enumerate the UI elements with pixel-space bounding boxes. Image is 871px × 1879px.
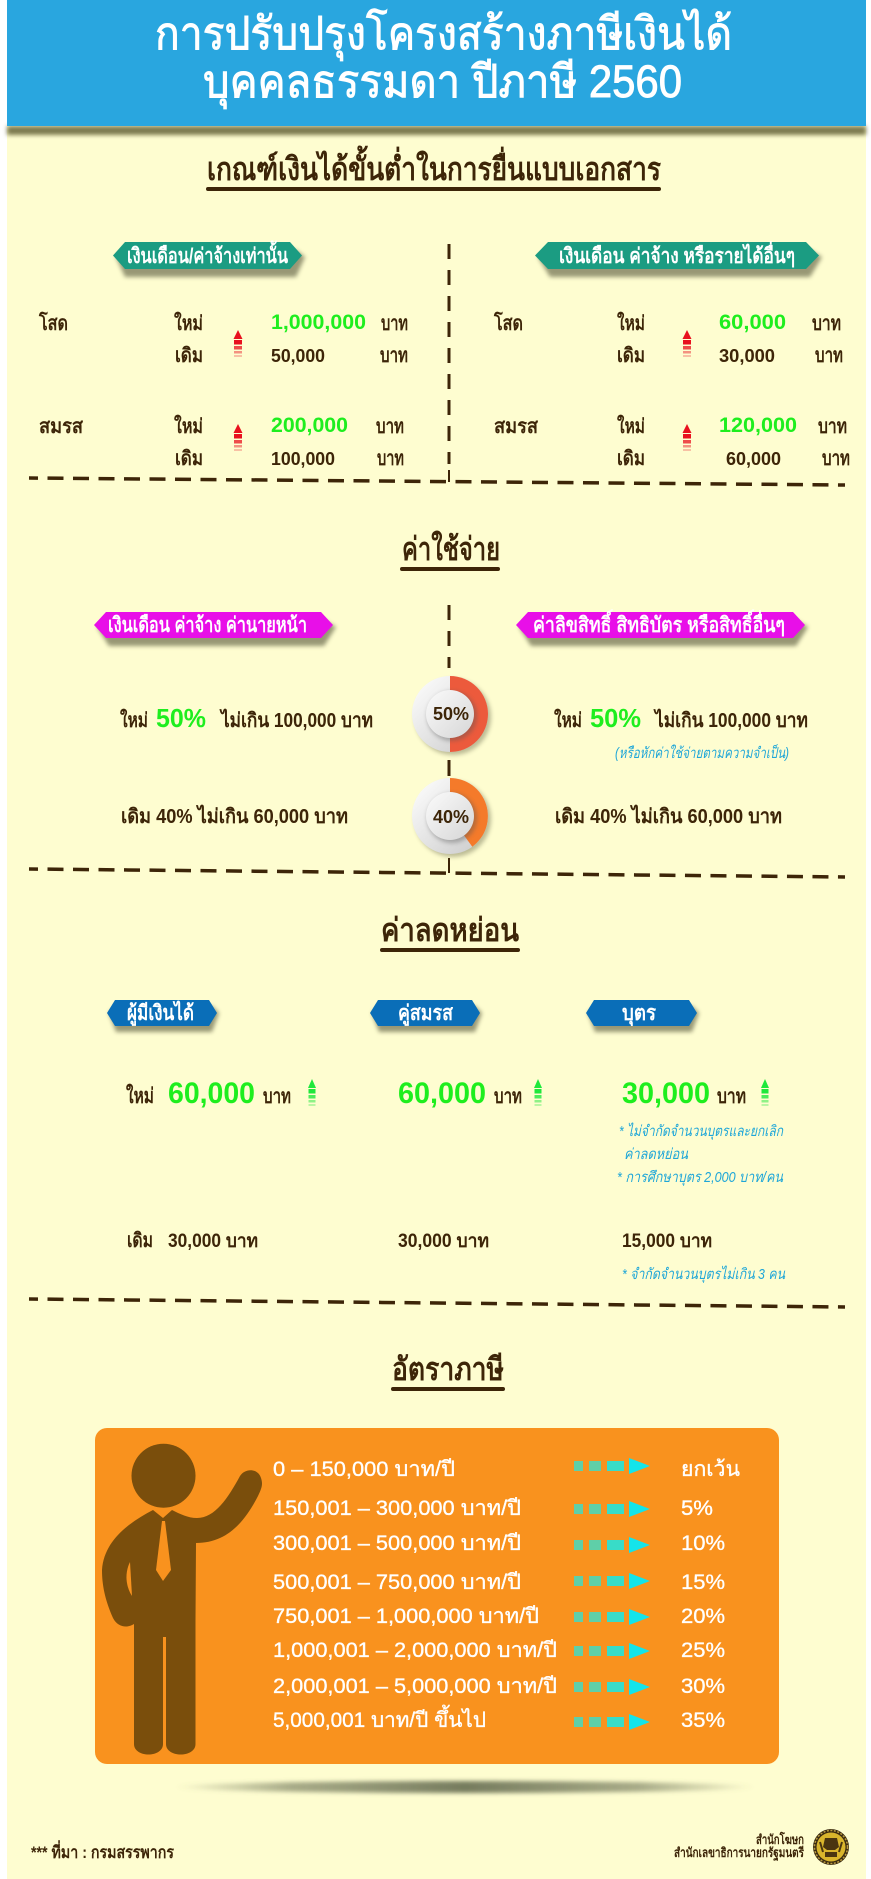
pill: spouse: คู่สมรส — [398, 1002, 453, 1027]
icon: green up arrow spouse — [534, 1079, 542, 1106]
right table: salary or other income: ใหม่ — [617, 414, 645, 438]
pill: taxpayer: ผู้มีเงินได้ — [127, 1000, 194, 1027]
tax rate values: 25% — [681, 1639, 725, 1662]
tax rate bracket labels: 150,001 – 300,000 บาท/ปี — [273, 1497, 521, 1520]
right table: salary or other income — [493, 311, 850, 470]
section heading: tax rate: อัตราภาษี — [392, 1351, 504, 1387]
allowance: old values: 15,000 บาท — [622, 1231, 712, 1252]
note: child old: * จำกัดจำนวนบุตรไม่เกิน 3 คน — [622, 1265, 786, 1283]
donut: 50 percent: 50% — [433, 704, 469, 724]
pill: salary only — [113, 240, 305, 277]
expenses: salary old: เดิม 40% ไม่เกิน 60,000 บาท — [121, 804, 348, 828]
allowance: old values: 30,000 บาท — [168, 1231, 258, 1252]
header banner — [7, 0, 866, 135]
left table: salary only: 100,000 — [271, 449, 335, 469]
section heading: minimum income — [206, 145, 661, 191]
pill: salary and commission — [94, 612, 336, 646]
pill: salary and commission: เงินเดือน ค่าจ้าง ค่านายหน้า — [108, 613, 307, 637]
icon: presenter figure — [102, 1444, 262, 1754]
note: actual expenses: (หรือหักค่าใช้จ่ายตามความจำเป็น) — [615, 744, 789, 762]
icon: red up arrow right single — [682, 330, 692, 357]
tax rate bracket labels: 750,001 – 1,000,000 บาท/ปี — [273, 1605, 539, 1628]
right table: salary or other income: เดิม — [617, 448, 645, 470]
section heading: allowances: ค่าลดหย่อน — [381, 912, 519, 948]
expenses: salary new: 50% — [156, 703, 206, 733]
panel divider: minimum income — [29, 244, 845, 485]
right table: salary or other income: สมรส — [494, 416, 539, 438]
tax rate values: 15% — [681, 1571, 725, 1594]
notes: child new — [617, 1122, 784, 1186]
left table: salary only: 1,000,000 — [271, 311, 366, 334]
left table: salary only: บาท — [380, 345, 408, 367]
right table: salary or other income: บาท — [815, 345, 843, 367]
pill: salary or other income: เงินเดือน ค่าจ้าง หรือรายได้อื่นๆ — [559, 240, 795, 268]
right table: salary or other income: บาท — [822, 448, 850, 470]
left table: salary only: โสด — [38, 311, 68, 335]
tax rate values — [681, 1458, 740, 1732]
right table: salary or other income: โสด — [493, 311, 523, 335]
tax rate values: 30% — [681, 1675, 725, 1698]
expenses: salary new: ใหม่ — [120, 708, 148, 732]
tax rate values: 20% — [681, 1605, 725, 1628]
expenses: royalties old: เดิม 40% ไม่เกิน 60,000 บาท — [555, 804, 782, 828]
allowance: child new: 30,000 — [622, 1077, 710, 1110]
tax rate bracket labels: 0 – 150,000 บาท/ปี — [273, 1458, 455, 1481]
title: การปรับปรุงโครงสร้างภาษีเงินได้ — [155, 8, 732, 61]
section heading: expenses — [400, 530, 500, 571]
expenses: royalties new: ไม่เกิน 100,000 บาท — [653, 708, 808, 732]
left table: salary only: ใหม่ — [174, 311, 203, 335]
title: บุคคลธรรมดา ปีภาษี 2560 — [203, 56, 682, 109]
tax rate bracket labels — [273, 1458, 557, 1732]
icon: green up arrow taxpayer — [308, 1079, 316, 1106]
credit: publisher — [674, 1831, 804, 1862]
tax rate bracket labels: 2,000,001 – 5,000,000 บาท/ปี — [273, 1675, 557, 1698]
left table: salary only: 200,000 — [271, 414, 348, 437]
icon: green up arrow child — [761, 1079, 769, 1106]
left table: salary only: ใหม่ — [174, 414, 203, 438]
tax rate values: 5% — [681, 1497, 713, 1520]
icon: red up arrow married — [234, 424, 242, 451]
allowance: spouse new: 60,000 — [398, 1077, 486, 1110]
allowance: taxpayer new: 60,000 — [168, 1077, 255, 1110]
icon: red up arrow single — [234, 330, 242, 357]
left table: salary only: สมรส — [39, 416, 84, 438]
notes: child new: * การศึกษาบุตร 2,000 บาท/คน — [617, 1169, 784, 1186]
right table: salary or other income: เดิม — [617, 345, 645, 367]
pill: copyright and patents — [516, 609, 808, 646]
pill: salary only: เงินเดือน/ค่าจ้างเท่านั้น — [127, 240, 288, 268]
allowance: old values — [127, 1230, 712, 1252]
right table: salary or other income: 120,000 — [719, 414, 797, 437]
pill: child — [586, 1000, 699, 1032]
right table: salary or other income: 60,000 — [719, 311, 786, 334]
left table: salary only — [38, 311, 408, 470]
right table: salary or other income: 60,000 — [726, 449, 781, 469]
pill: copyright and patents: ค่าลิขสิทธิ์ สิทธิบัตร หรือสิทธิ์อื่นๆ — [533, 609, 785, 637]
pill: child: บุตร — [622, 1002, 657, 1027]
notes: child new: ค่าลดหย่อน — [624, 1146, 689, 1163]
icon: red up arrow right married — [682, 424, 692, 451]
donut: 40 percent: 40% — [433, 807, 469, 827]
tax rate values: 10% — [681, 1532, 725, 1555]
right table: salary or other income: บาท — [818, 416, 847, 438]
donut: 50 percent — [412, 676, 491, 755]
right table: salary or other income: 30,000 — [719, 346, 775, 366]
tax rate bracket labels: 300,001 – 500,000 บาท/ปี — [273, 1532, 521, 1555]
panel: tax rate table — [95, 1428, 779, 1764]
donut: 40 percent — [412, 778, 491, 857]
tax rate bracket labels: 500,001 – 750,000 บาท/ปี — [273, 1571, 521, 1594]
pill: spouse — [370, 1000, 482, 1032]
expenses: royalties new: 50% — [590, 703, 641, 733]
left table: salary only: บาท — [377, 448, 404, 470]
divider: allowances — [29, 1299, 845, 1307]
expenses: royalties new — [554, 703, 808, 733]
panel ground shadow — [175, 1781, 755, 1793]
tax rate values: ยกเว้น — [681, 1458, 740, 1481]
notes: child new: * ไม่จำกัดจำนวนบุตรและยกเลิก — [619, 1122, 784, 1140]
allowance: taxpayer new — [126, 1077, 291, 1110]
section heading: minimum income: เกณฑ์เงินได้ขั้นต่ำในการยื่นแบบเอกสาร — [207, 145, 661, 187]
allowance: spouse new: บาท — [494, 1086, 522, 1108]
credit: publisher: สำนักโฆษก — [756, 1831, 804, 1847]
panel divider: expenses — [29, 605, 845, 877]
allowance: taxpayer new: ใหม่ — [126, 1083, 154, 1108]
tax rate bracket labels: 5,000,001 บาท/ปี ขึ้นไป — [273, 1705, 486, 1732]
allowance: old values: เดิม — [127, 1230, 153, 1252]
source note: *** ที่มา : กรมสรรพากร — [31, 1840, 175, 1862]
right table: salary or other income: ใหม่ — [617, 311, 645, 335]
allowance: child new: บาท — [717, 1086, 746, 1108]
tax rate bracket labels: 1,000,001 – 2,000,000 บาท/ปี — [273, 1639, 557, 1662]
expenses: royalties new: ใหม่ — [554, 708, 582, 732]
expenses: salary new — [120, 703, 373, 733]
left table: salary only: เดิม — [175, 345, 203, 367]
allowance: taxpayer new: บาท — [263, 1086, 291, 1108]
icon: government seal — [813, 1829, 849, 1865]
credit: publisher: สำนักเลขาธิการนายกรัฐมนตรี — [674, 1845, 804, 1862]
left table: salary only: เดิม — [175, 448, 203, 470]
title — [155, 8, 732, 109]
pill: salary or other income — [535, 240, 822, 277]
cyan row arrows — [574, 1458, 650, 1730]
expenses: salary new: ไม่เกิน 100,000 บาท — [219, 708, 373, 732]
tax rate values: 35% — [681, 1709, 725, 1732]
left table: salary only: บาท — [381, 313, 408, 335]
right table: salary or other income: บาท — [812, 313, 841, 335]
left table: salary only: 50,000 — [271, 346, 325, 366]
pill: taxpayer — [107, 1000, 219, 1032]
left table: salary only: บาท — [376, 416, 404, 438]
section heading: expenses: ค่าใช้จ่าย — [402, 530, 500, 567]
allowance: old values: 30,000 บาท — [398, 1231, 489, 1252]
